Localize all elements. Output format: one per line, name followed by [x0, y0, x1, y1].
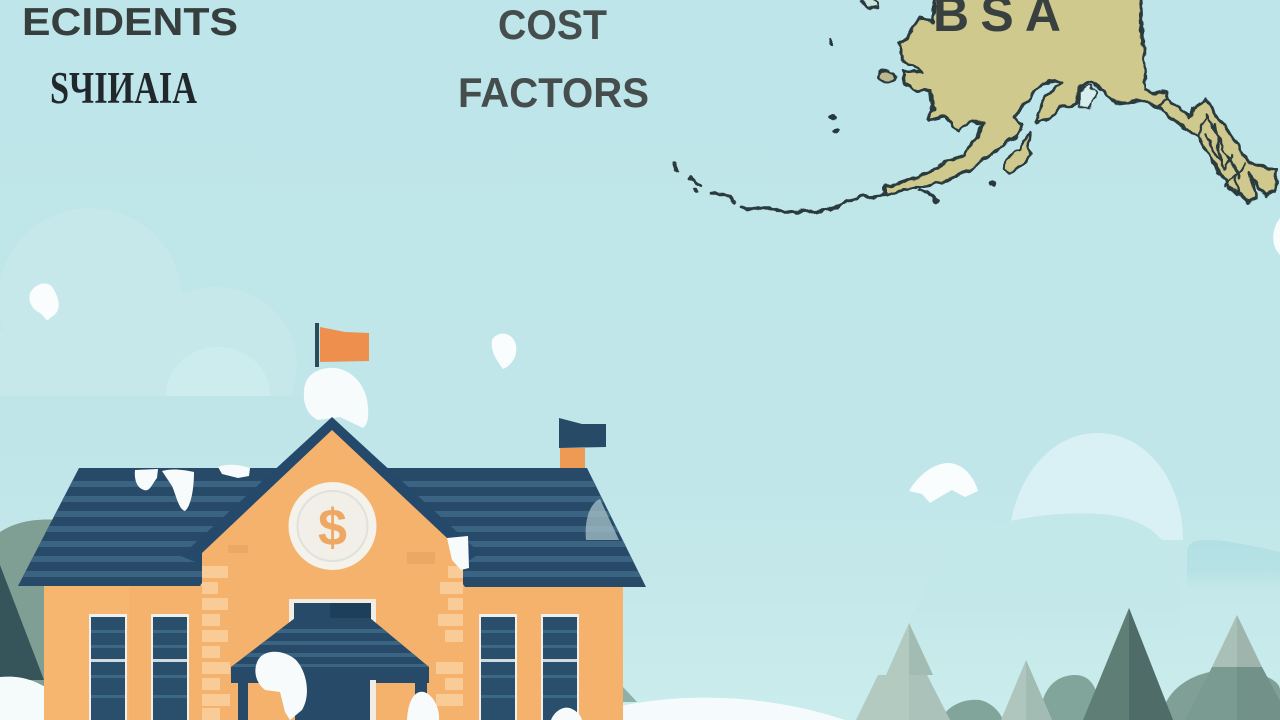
snow cap on peak — [304, 368, 368, 428]
school building — [0, 323, 670, 720]
island north — [862, 0, 878, 8]
chimney with dark flag — [559, 418, 606, 468]
gable front — [202, 430, 463, 720]
left background clouds — [0, 208, 320, 456]
walls — [44, 585, 623, 720]
garbled sub-heading: SЧIИAIA — [50, 63, 197, 113]
brick quoins — [202, 545, 463, 720]
right windows — [479, 614, 579, 720]
tree 4 — [1212, 615, 1262, 667]
dollar medallion — [288, 482, 376, 570]
Alaska mainland — [885, 0, 1276, 202]
island: St Lawrence — [877, 68, 897, 86]
orange flag — [315, 323, 369, 367]
island: Kodiak — [1005, 133, 1031, 173]
Aleutian chain — [674, 163, 937, 212]
right background clouds — [900, 433, 1280, 640]
snow patches — [135, 465, 582, 720]
heading: cost: COST — [498, 1, 607, 48]
bay highlight — [1079, 86, 1098, 108]
heading: ecidents: ECIDENTS — [22, 1, 238, 44]
left windows — [89, 614, 189, 720]
snow ground right — [620, 698, 845, 720]
translucent snow on right roof — [586, 499, 619, 540]
porch — [230, 599, 430, 720]
floating snow flakes — [29, 218, 1280, 503]
tree 3 — [1083, 608, 1173, 720]
gable roof — [181, 417, 480, 565]
tree 1 — [856, 623, 950, 720]
background hills and tree left of school — [0, 520, 637, 720]
tree 2 — [1001, 660, 1052, 720]
small islands — [826, 36, 995, 186]
right roof — [388, 468, 646, 587]
left roof — [18, 468, 276, 586]
dollar medallion: $ — [318, 499, 347, 557]
heading: factors: FACTORS — [458, 69, 649, 116]
pine trees and hills — [856, 608, 1280, 720]
panhandle inner lines — [1157, 98, 1245, 195]
map: Alaska — [674, 0, 1276, 212]
